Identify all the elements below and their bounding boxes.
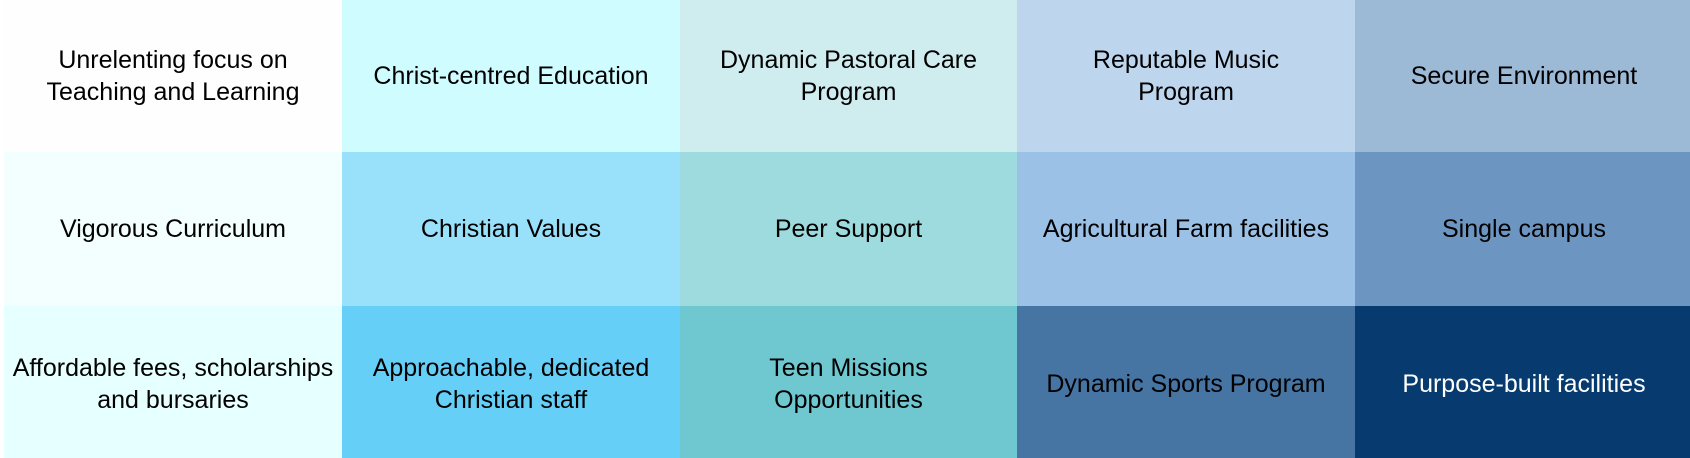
cell: Teen Missions xyxy=(680,306,1017,458)
cell: Vigorous Curriculum xyxy=(4,152,342,306)
cell: Dynamic Pastoral Care xyxy=(680,0,1017,152)
cell: Reputable Music xyxy=(1017,0,1355,152)
cell: Reputable Music: Reputable Music xyxy=(1093,46,1279,74)
cell: Unrelenting focus: Teaching and Learning xyxy=(46,78,299,106)
cell: Agricultural Farm xyxy=(1017,152,1355,306)
cell: Affordable fees: Affordable fees, scholarships xyxy=(13,354,333,382)
cell: Approachable staff: Approachable, dedicated xyxy=(373,354,649,382)
cell: Single campus: Single campus xyxy=(1442,215,1606,243)
cell: Single campus xyxy=(1355,152,1690,306)
cell: Christ-centred Education: Christ-centred Education xyxy=(373,62,649,90)
cell: Reputable Music: Program xyxy=(1138,78,1234,106)
cell: Dynamic Pastoral Care: Dynamic Pastoral Care xyxy=(720,46,977,74)
cell: Approachable staff: Christian staff xyxy=(435,386,587,414)
cell: Christian Values: Christian Values xyxy=(421,215,601,243)
cell: Teen Missions: Opportunities xyxy=(774,386,923,414)
cell: Vigorous Curriculum: Vigorous Curriculum xyxy=(60,215,286,243)
cell: Peer Support: Peer Support xyxy=(775,215,922,243)
cell: Purpose-built xyxy=(1355,306,1690,458)
cell: Affordable fees xyxy=(4,306,342,458)
cell: Dynamic Sports: Dynamic Sports Program xyxy=(1046,370,1326,398)
cell: Dynamic Sports xyxy=(1017,306,1355,458)
cell: Dynamic Pastoral Care: Program xyxy=(801,78,896,106)
cell: Unrelenting focus xyxy=(4,0,342,152)
cell: Purpose-built: Purpose-built facilities xyxy=(1402,370,1646,398)
cell: Affordable fees: and bursaries xyxy=(97,386,249,414)
cell: Christ-centred Education xyxy=(342,0,680,152)
cell: Secure Environment: Secure Environment xyxy=(1411,62,1637,90)
cell: Peer Support xyxy=(680,152,1017,306)
cell: Christian Values xyxy=(342,152,680,306)
cell: Agricultural Farm: Agricultural Farm facilities xyxy=(1043,215,1329,243)
cell: Secure Environment xyxy=(1355,0,1690,152)
cell: Teen Missions: Teen Missions xyxy=(769,354,928,382)
cell: Unrelenting focus: Unrelenting focus on xyxy=(58,46,288,74)
cell: Approachable staff xyxy=(342,306,680,458)
